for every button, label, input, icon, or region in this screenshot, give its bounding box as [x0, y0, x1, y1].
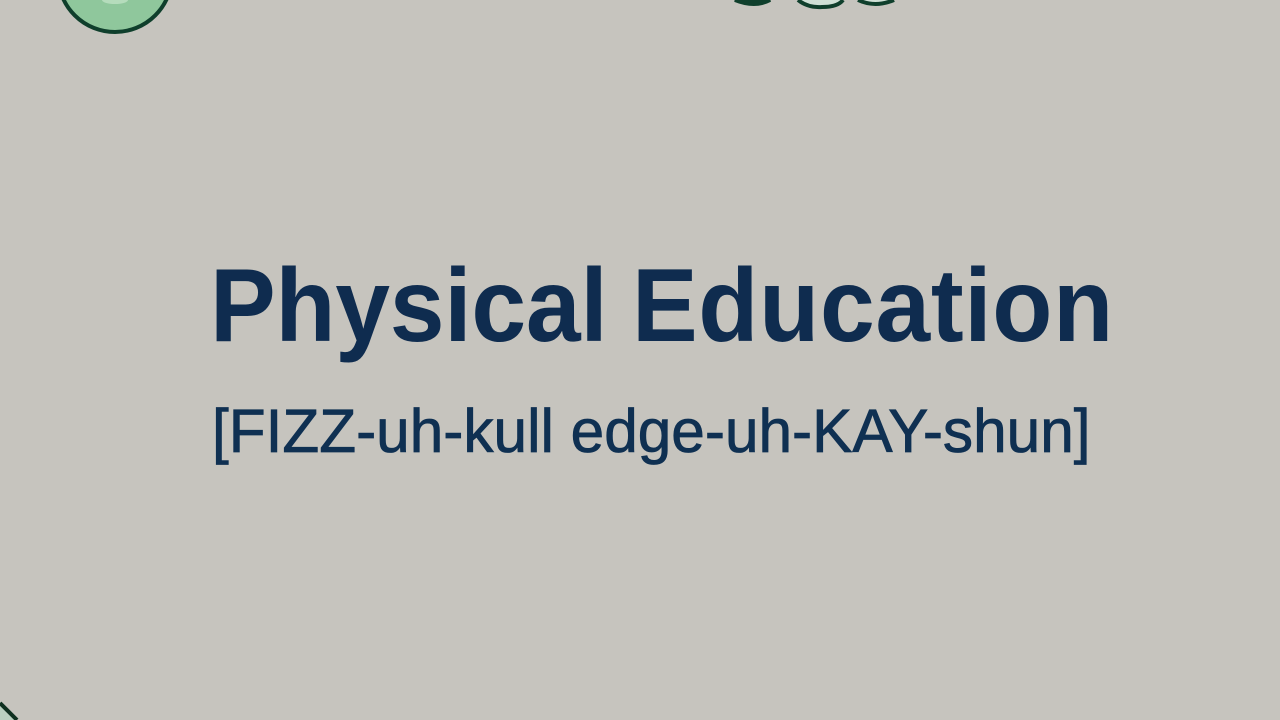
- pronunciation: [FIZZ-uh-kull edge-uh-KAY-shun]: [212, 397, 1091, 465]
- icon: green shape at top centre: [735, 0, 894, 7]
- icon: corner shape at bottom left: [0, 702, 17, 720]
- title: Physical Education: [210, 248, 1114, 364]
- icon: green circle at top left: [58, 0, 172, 32]
